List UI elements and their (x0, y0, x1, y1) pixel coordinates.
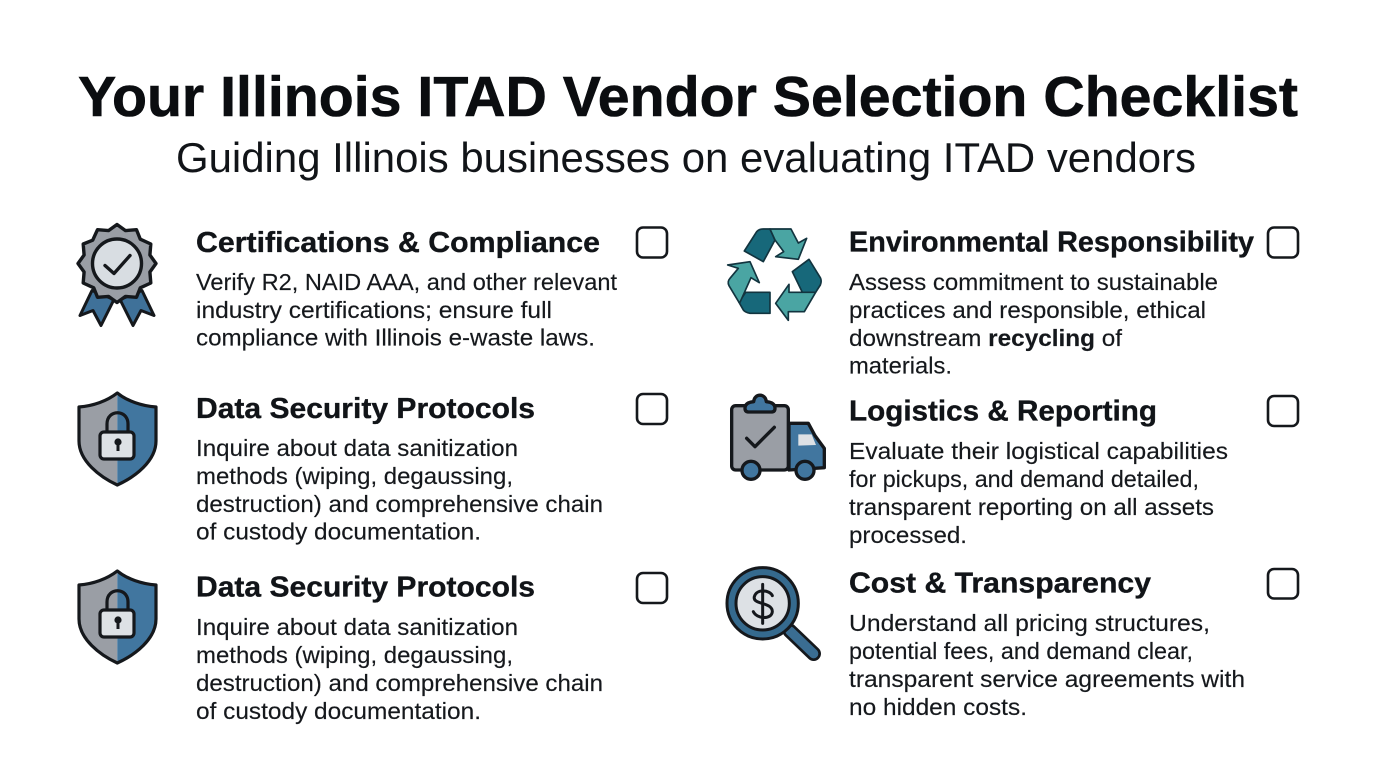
text block: practices and responsible, ethical (849, 297, 1206, 323)
checkbox (1268, 396, 1298, 426)
heading: Cost & Transparency (849, 568, 1151, 600)
text block: Verify R2, NAID AAA, and other relevant (196, 269, 618, 295)
text block (196, 435, 603, 544)
text block: methods (wiping, degaussing, (196, 463, 513, 489)
icon: award badge (78, 224, 156, 326)
text block: Evaluate their logistical capabilities (849, 438, 1228, 464)
checkbox (1268, 228, 1298, 258)
text block: of custody documentation. (196, 518, 481, 544)
icon: shield with lock (79, 393, 156, 485)
panel: data security protocols 2 (79, 571, 667, 724)
text block: processed. (849, 522, 967, 548)
panel: logistics and reporting (732, 395, 1298, 548)
heading: Logistics & Reporting (849, 396, 1157, 428)
panel: certifications and compliance (78, 224, 667, 350)
icon: magnifier with dollar (727, 568, 814, 654)
text block: materials. (849, 352, 952, 378)
panel: data security protocols 1 (79, 393, 667, 544)
panel: cost and transparency (727, 568, 1298, 720)
text block: methods (wiping, degaussing, (196, 642, 513, 668)
text block (849, 610, 1245, 720)
text block: Inquire about data sanitization (196, 614, 518, 640)
heading: Data Security Protocols (196, 393, 535, 425)
text block: industry certifications; ensure full (196, 297, 552, 323)
text block: transparent reporting on all assets (849, 494, 1214, 520)
text block: of custody documentation. (196, 698, 481, 724)
text block (849, 269, 1218, 378)
checkbox (637, 394, 667, 424)
checkbox (1268, 569, 1298, 598)
text block: for pickups, and demand detailed, (849, 466, 1199, 492)
checkbox (637, 228, 667, 258)
text block: compliance with Illinois e-waste laws. (196, 324, 595, 350)
subtitle: Guiding Illinois businesses on evaluating ITAD vendors (176, 134, 1196, 181)
text block: downstream recycling of (849, 325, 1123, 351)
text block: Assess commitment to sustainable (849, 269, 1218, 295)
text block: potential fees, and demand clear, (849, 638, 1193, 664)
heading: Environmental Responsibility (849, 226, 1254, 258)
panel: environmental responsibility (728, 226, 1298, 378)
icon: shield with lock (79, 571, 156, 663)
text block: Understand all pricing structures, (849, 610, 1210, 636)
text block: destruction) and comprehensive chain (196, 670, 603, 696)
heading: Certifications & Compliance (196, 227, 600, 259)
text block: transparent service agreements with (849, 666, 1245, 692)
heading: Data Security Protocols (196, 572, 535, 604)
text block (196, 269, 618, 350)
text block: Inquire about data sanitization (196, 435, 518, 461)
checkbox (637, 573, 667, 603)
text block (196, 614, 603, 724)
text block: destruction) and comprehensive chain (196, 491, 603, 517)
icon: clipboard truck (732, 395, 824, 479)
icon: recycling arrows (728, 229, 821, 320)
text block (849, 438, 1228, 548)
text block: no hidden costs. (849, 694, 1027, 720)
title: Your Illinois ITAD Vendor Selection Checklist (78, 65, 1298, 129)
